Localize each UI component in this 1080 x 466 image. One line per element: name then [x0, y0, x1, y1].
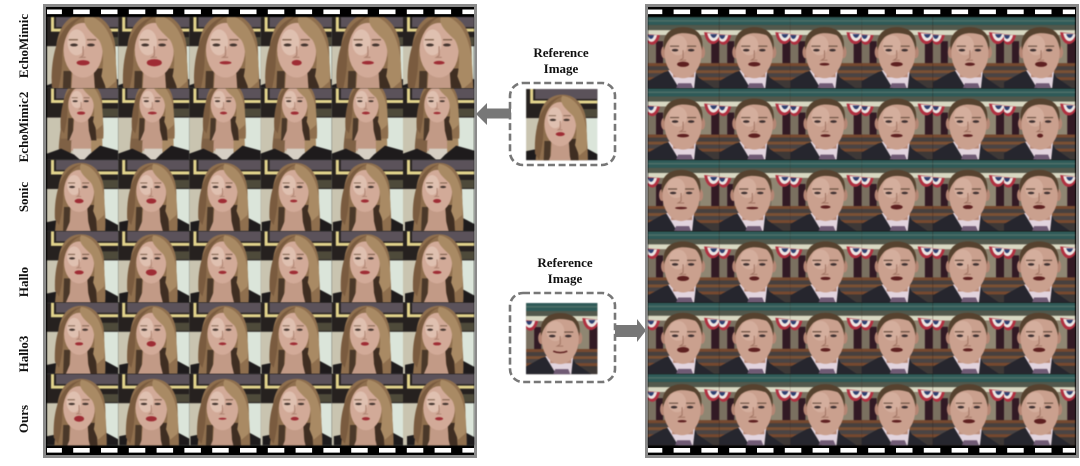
panel: man comparison grid	[644, 6, 1078, 456]
row: Hallo frames	[47, 231, 476, 305]
film strip: top right	[648, 10, 1075, 14]
row: man frames 6	[645, 374, 1078, 445]
label: Ours: Ours	[16, 405, 31, 433]
row: man frames 3	[644, 160, 1078, 231]
photo: man reference	[523, 303, 600, 374]
label: Sonic: Sonic	[16, 182, 31, 212]
row: man frames 5	[645, 303, 1078, 374]
row: man frames 4	[645, 231, 1078, 302]
row: Ours frames	[47, 374, 478, 452]
arrow: right toward man grid	[615, 319, 646, 342]
row: EchoMimic2 frames	[47, 81, 474, 160]
row: man frames 1	[645, 17, 1078, 88]
film strip: bottom left	[47, 448, 474, 453]
label: Hallo: Hallo	[16, 267, 31, 297]
label: EchoMimic2: EchoMimic2	[16, 92, 31, 162]
label: Hallo3: Hallo3	[16, 335, 31, 372]
row: Hallo3 frames	[47, 303, 476, 376]
label: EchoMimic: EchoMimic	[16, 14, 31, 78]
film strip: bottom right	[648, 448, 1075, 453]
heading: reference image (bottom): Image	[548, 271, 583, 286]
heading: reference image (top): Image	[544, 61, 579, 76]
callout: man reference image	[510, 255, 615, 382]
row: EchoMimic frames	[47, 14, 474, 105]
arrow: left toward woman grid	[476, 103, 511, 125]
heading: reference image (bottom): Reference	[537, 255, 593, 270]
photo: woman reference	[526, 89, 597, 168]
heading: reference image (top): Reference	[533, 45, 589, 60]
row: Sonic frames	[47, 160, 476, 233]
film strip: top left	[47, 10, 474, 14]
panel: woman comparison grid	[44, 6, 478, 456]
callout: woman reference image	[510, 45, 615, 168]
row: man frames 2	[645, 88, 1078, 160]
